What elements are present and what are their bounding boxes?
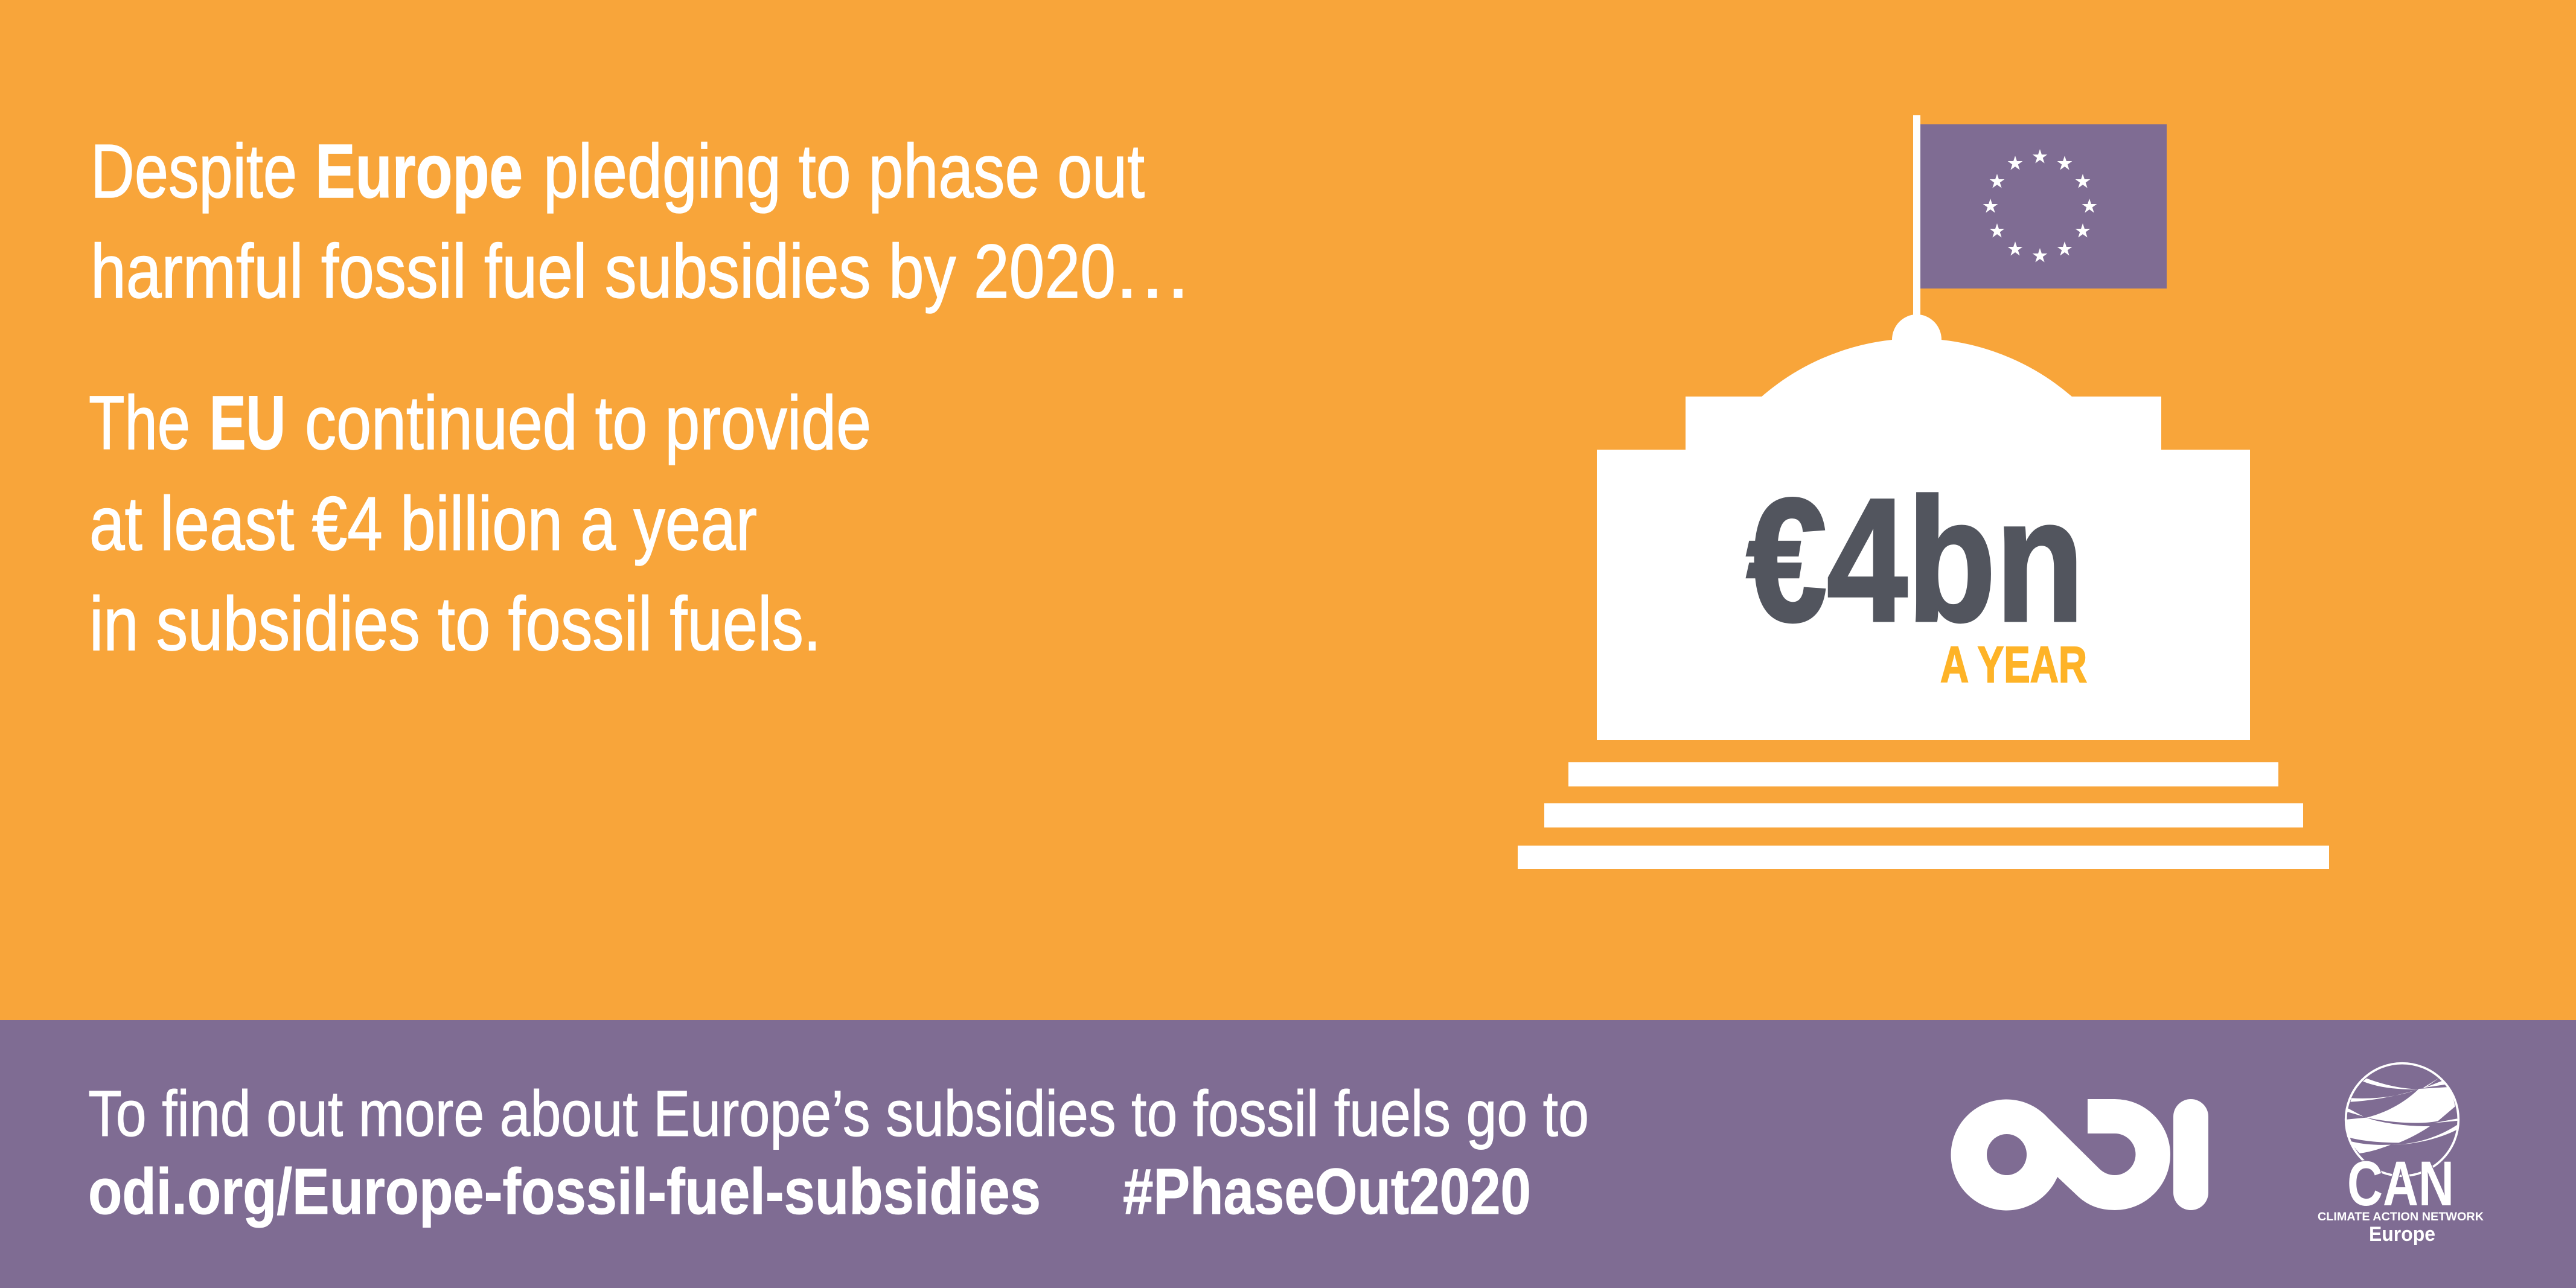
text block: EU subsidies statement: at least €4 billion a year: [89, 481, 757, 566]
heading: pledge statement: …: [1112, 229, 1193, 314]
step 3: [1518, 846, 2329, 869]
figure: 4bn: €4bn: [1747, 462, 2084, 658]
CAN globe: [2345, 1063, 2459, 1176]
footer text: call to action: To find out more about Europe’s subsidies to fossil fuels go to: [88, 1077, 1589, 1150]
background: [0, 0, 2576, 1020]
text block: EU subsidies statement: in subsidies to fossil fuels.: [89, 581, 821, 666]
CAN wordmark: CAN: [2347, 1149, 2454, 1219]
text block: EU subsidies statement: The: [89, 380, 190, 465]
dome: [1761, 314, 2073, 397]
heading: pledge statement: harmful fossil fuel subsidies by 2020: [91, 229, 1116, 314]
step 2: [1544, 803, 2303, 827]
main block: [1597, 450, 2250, 740]
footer text: call to action: [88, 1077, 1589, 1228]
upper block: [1686, 397, 2161, 451]
footer band: [0, 1020, 2576, 1288]
network name: CLIMATE ACTION NETWORK: [2318, 1211, 2484, 1223]
heading: pledge statement: Despite: [91, 129, 297, 214]
flag field: [1920, 124, 2167, 289]
ODI symbol: [1951, 1099, 2170, 1210]
heading: pledge statement: [91, 129, 1193, 314]
text block: EU subsidies statement: continued to provide: [305, 380, 871, 465]
footer text: call to action: #PhaseOut2020: [1123, 1155, 1531, 1228]
step 1: [1568, 762, 2278, 786]
logo: CAN Europe: [2318, 1063, 2484, 1246]
footer text: call to action: odi.org/Europe-fossil-fuel-subsidies: [88, 1155, 1041, 1228]
logo: ODI: [1951, 1099, 2208, 1210]
text block: EU subsidies statement: [89, 380, 871, 666]
heading: pledge statement: pledging to phase out: [543, 129, 1145, 214]
icon: EU flag: [1913, 115, 2167, 320]
heading: pledge statement: Europe: [315, 129, 523, 214]
label: a year: A YEAR: [1940, 636, 2087, 693]
icon: parliament building: [1518, 314, 2329, 869]
Europe label: Europe: [2369, 1223, 2435, 1246]
flag stars: [1983, 149, 2097, 263]
text block: EU subsidies statement: EU: [209, 380, 286, 465]
flag pole: [1913, 115, 1920, 320]
ODI bar: [2173, 1099, 2208, 1210]
